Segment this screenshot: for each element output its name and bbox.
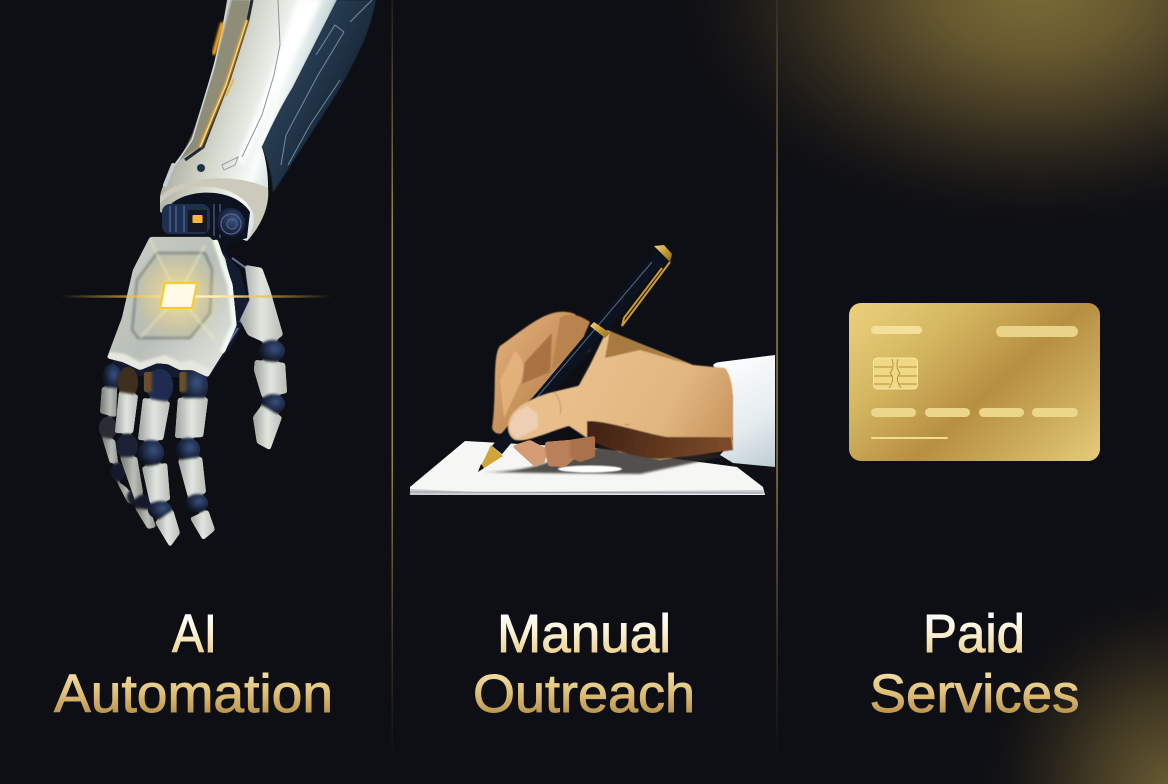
illustration: gold credit card — [849, 303, 1100, 461]
finger 1 — [175, 369, 215, 540]
label: Paid Services: Services — [870, 664, 1080, 724]
lower fingers — [512, 436, 595, 467]
finger 4 — [99, 364, 143, 505]
palm — [107, 237, 236, 377]
label: AI Automation: Automation — [54, 664, 333, 724]
label: Paid Services — [870, 604, 1080, 724]
panel: AI Automation — [54, 0, 376, 724]
amber light strips — [200, 20, 247, 147]
paper — [410, 441, 765, 495]
card top bars — [871, 326, 1078, 337]
panel: Paid Services — [849, 303, 1100, 724]
card chip — [874, 358, 918, 389]
label: Manual Outreach: Manual — [497, 604, 671, 664]
illustration: hand writing with pen — [410, 245, 775, 495]
illustration: robotic arm — [60, 0, 376, 547]
divider left — [392, 0, 393, 760]
label: AI Automation — [54, 604, 333, 724]
pen — [478, 245, 672, 472]
label: Manual Outreach: Outreach — [473, 664, 695, 724]
card name line — [871, 437, 948, 439]
label: Paid Services: Paid — [923, 604, 1025, 664]
finger 3 — [115, 367, 156, 529]
label: Manual Outreach — [473, 604, 695, 724]
divider right — [776, 0, 778, 760]
glowing chip — [60, 240, 332, 342]
thumb — [240, 265, 287, 450]
top right gold glow — [650, 0, 1168, 245]
thumb — [508, 353, 733, 440]
wrist joint — [162, 193, 250, 280]
finger 2 — [138, 369, 180, 547]
hand — [492, 312, 733, 460]
card number bars — [871, 408, 1078, 417]
panel: Manual Outreach — [410, 245, 775, 724]
shirt cuff — [713, 355, 775, 467]
forearm — [160, 0, 376, 241]
label: AI Automation: AI — [172, 604, 217, 664]
hand base joints — [105, 250, 250, 378]
bottom right gold glow — [960, 570, 1168, 784]
